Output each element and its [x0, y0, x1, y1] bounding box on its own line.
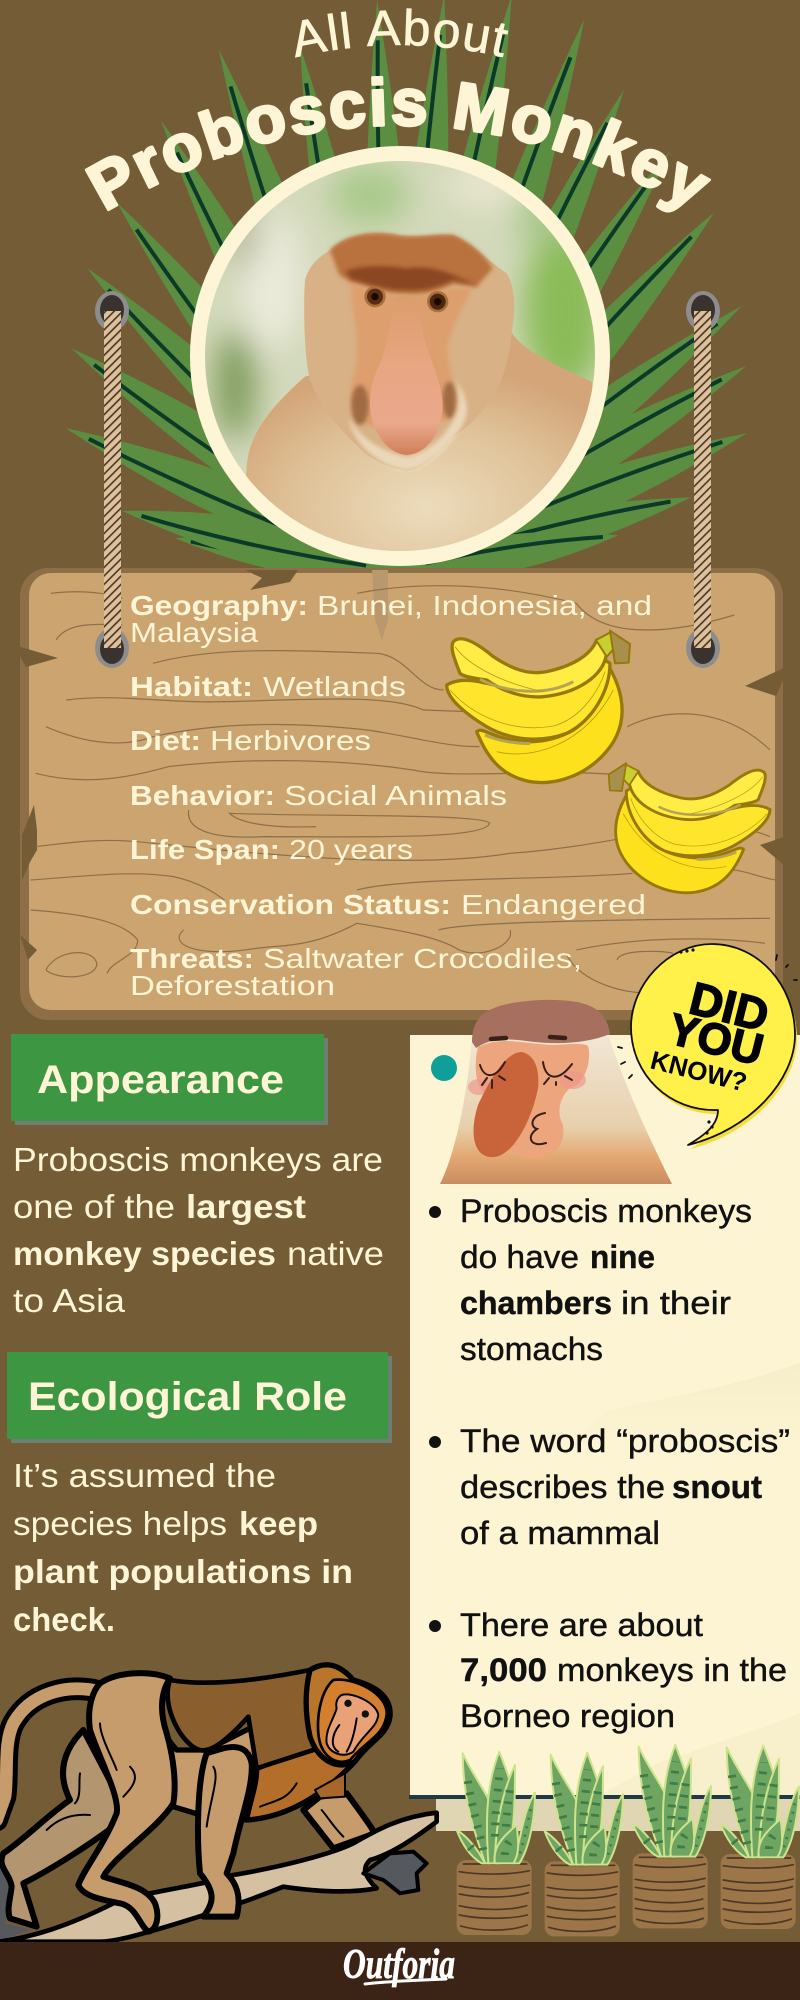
plant 3 — [633, 1745, 711, 1928]
wooden sign board — [14, 568, 790, 1020]
bullet: nine chambers: do have — [460, 1239, 579, 1275]
fact: threats: Threats: — [130, 943, 254, 974]
faint stem on board — [372, 570, 388, 640]
bullet: population — [429, 1607, 787, 1734]
left rope — [95, 291, 129, 668]
appearance text — [13, 1141, 384, 1319]
appearance text: largest — [186, 1188, 306, 1225]
callout: did you know bubble: YOU — [664, 1005, 768, 1075]
appearance text: to Asia — [13, 1282, 126, 1319]
bullet: the word proboscis: The word “proboscis” — [460, 1423, 790, 1459]
photo: proboscis monkey in cream circle — [190, 146, 613, 567]
far leg — [1, 1730, 120, 1927]
illustration: monkey on branch — [0, 1665, 437, 1942]
bullet: nine chambers: chambers — [460, 1285, 612, 1321]
footer bar — [0, 1942, 800, 2000]
saddle fur — [168, 1670, 315, 1768]
bullet: population: 7,000 — [460, 1652, 547, 1688]
board notches — [14, 570, 790, 960]
fact: geography — [130, 590, 652, 648]
leaves — [457, 1752, 535, 1863]
fact: habitat: Habitat: — [130, 671, 253, 702]
far arm — [303, 1793, 375, 1848]
monkey head — [304, 233, 514, 471]
monkey body — [246, 332, 592, 551]
fact: conservation status: Conservation Status: — [130, 889, 451, 920]
cute monkey face — [476, 1041, 589, 1158]
pot — [457, 1860, 532, 1935]
fact: geography: Malaysia — [130, 617, 258, 648]
ecological role text — [13, 1457, 353, 1638]
fact: life span: 20 years — [289, 834, 413, 865]
fact: threats — [130, 943, 582, 1001]
fact: conservation status: Endangered — [461, 889, 646, 920]
appearance text: monkey species — [13, 1235, 276, 1272]
ecological role text: check. — [13, 1601, 115, 1638]
potted plants — [457, 1745, 799, 1936]
branch — [0, 1813, 437, 1942]
callout: did you know bubble: DID — [685, 972, 774, 1041]
fact: diet: Diet: — [130, 725, 201, 756]
fact: behavior — [130, 780, 507, 811]
bullet: nine chambers: stomachs — [460, 1331, 603, 1367]
tail — [0, 1689, 100, 1820]
chest — [247, 1747, 353, 1820]
logo: Outforia: Outforia — [343, 1942, 455, 1988]
bullet: the word proboscis: of a mammal — [460, 1515, 660, 1551]
plant 4 — [721, 1746, 799, 1929]
fact bullets — [429, 1193, 790, 1734]
title: All About — [295, 8, 508, 58]
plant 2 — [545, 1753, 623, 1936]
wood grain — [31, 586, 775, 993]
bullet: the word proboscis: describes the — [460, 1469, 665, 1505]
ecological role text: It’s assumed the — [13, 1457, 276, 1494]
icon: teal dot — [431, 1055, 457, 1081]
callout: did you know bubble — [618, 944, 797, 1149]
ecological role text: species helps — [13, 1505, 227, 1542]
panel: did you know — [409, 1035, 800, 1831]
ecological role text: plant populations in — [13, 1553, 353, 1590]
rock left — [0, 1867, 32, 1940]
fact: geography: Brunei, Indonesia, and — [317, 590, 652, 621]
monkey nose shadows — [351, 385, 369, 425]
icons: banana bunches — [447, 631, 770, 893]
monkey brow — [330, 233, 493, 295]
bullet: population: Borneo region — [460, 1698, 675, 1734]
bullet: nine chambers: Proboscis monkeys — [460, 1193, 752, 1229]
fact: behavior: Behavior: — [130, 780, 275, 811]
rock right — [363, 1852, 427, 1893]
fact: habitat: Wetlands — [263, 671, 406, 702]
photo content — [205, 161, 595, 551]
appearance heading — [11, 1034, 328, 1125]
fact: geography: Geography: — [130, 590, 308, 621]
fact: diet — [130, 725, 371, 756]
monkey face mask — [351, 283, 472, 428]
fact: life span — [130, 834, 413, 865]
fact: threats: Deforestation — [130, 970, 335, 1001]
appearance text: Proboscis monkeys are — [13, 1141, 383, 1178]
bullet: population: monkeys in the — [557, 1652, 787, 1688]
banana bunch small — [609, 763, 770, 893]
banana bunch large — [447, 631, 630, 782]
bullet: the word proboscis — [429, 1423, 790, 1551]
bullet: nine chambers — [429, 1193, 752, 1367]
cute monkey cap — [472, 1000, 610, 1048]
illustration: cute monkey face — [440, 1000, 672, 1184]
title: Proboscis Monkey: Proboscis Monkey — [84, 76, 712, 212]
fact list on board — [130, 590, 652, 1001]
fact: diet: Herbivores — [210, 725, 371, 756]
appearance heading: Appearance — [37, 1058, 284, 1102]
cute monkey nose — [474, 1052, 538, 1157]
near hind leg — [78, 1673, 175, 1932]
fact: life span: Life Span: — [130, 834, 280, 865]
front arm — [198, 1747, 252, 1917]
plant 1 — [457, 1752, 535, 1935]
monkey eyes — [364, 286, 448, 312]
cute monkey eyes and mouth lines — [480, 1037, 572, 1144]
bullet: nine chambers: in their — [621, 1285, 731, 1321]
palm leaves fan — [57, 0, 757, 590]
bullet: nine chambers: nine — [590, 1239, 655, 1275]
ecological role heading: Ecological Role — [28, 1375, 347, 1419]
fur details — [315, 1773, 345, 1798]
fact: behavior: Social Animals — [284, 780, 507, 811]
face mask — [326, 1694, 378, 1755]
right rope — [686, 291, 720, 668]
monkey nose — [370, 296, 443, 455]
fact: threats: Saltwater Crocodiles, — [263, 943, 582, 974]
monkey in photo coordinates — [246, 230, 592, 551]
title: All About: All About — [295, 8, 508, 58]
ecological role text: keep — [239, 1505, 318, 1542]
fact: conservation status — [130, 889, 646, 920]
appearance text: native — [287, 1235, 384, 1272]
torso — [163, 1727, 257, 1820]
fact: habitat — [130, 671, 406, 702]
bullet: the word proboscis: snout — [672, 1469, 762, 1505]
ecological role heading — [7, 1352, 392, 1443]
appearance text: one of the — [13, 1188, 175, 1225]
photo frame — [190, 146, 610, 566]
head — [306, 1665, 390, 1765]
monkey chin — [348, 380, 467, 471]
bullet: population: There are about — [460, 1607, 703, 1643]
callout: did you know bubble: KNOW? — [648, 1045, 750, 1098]
